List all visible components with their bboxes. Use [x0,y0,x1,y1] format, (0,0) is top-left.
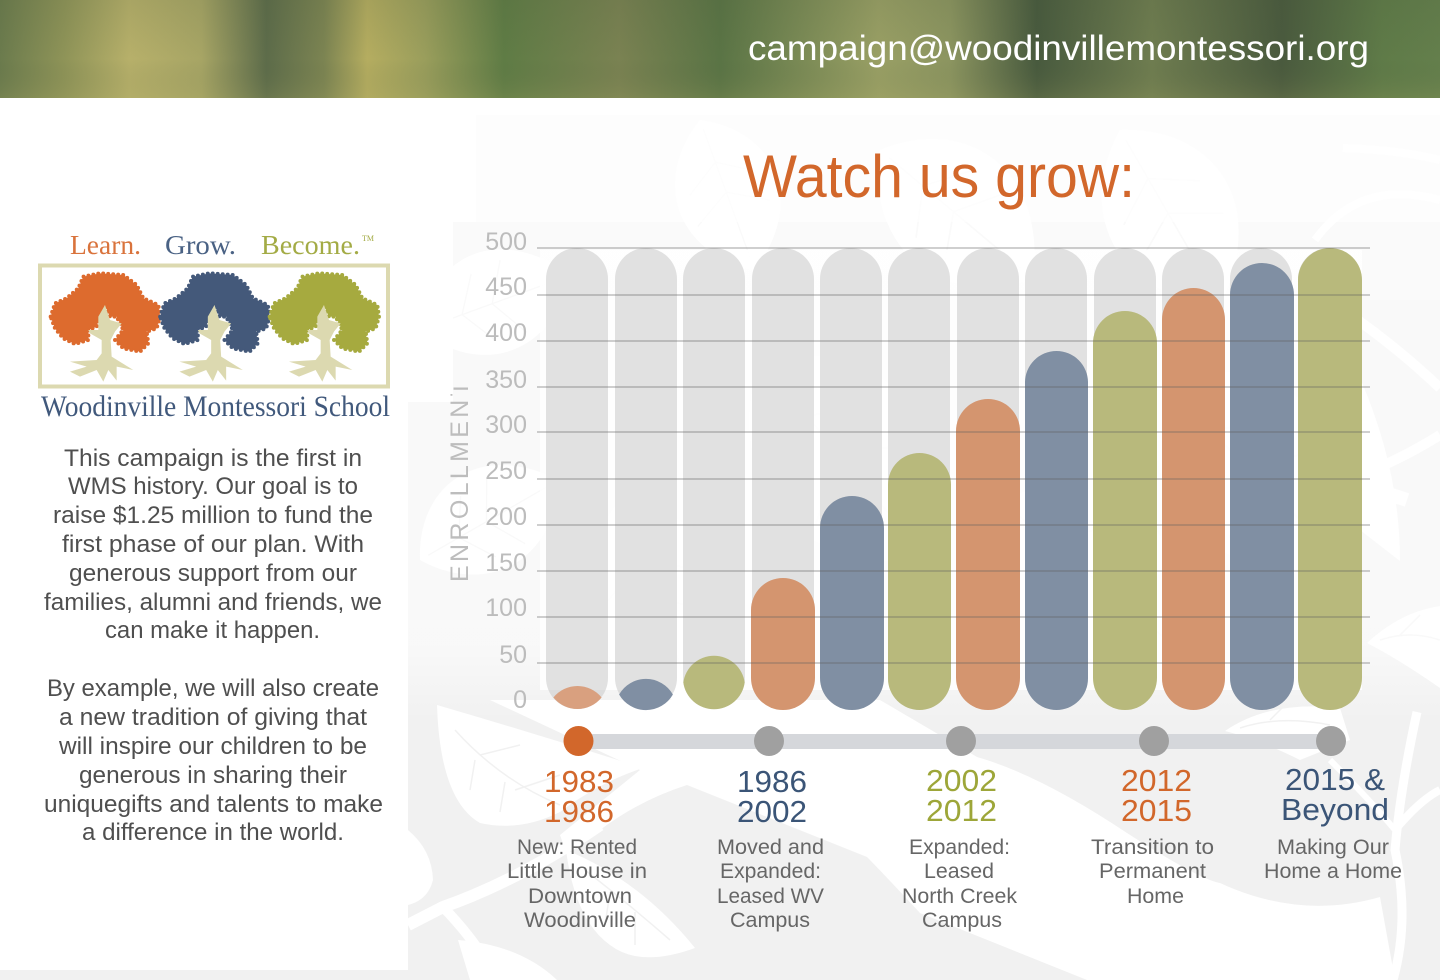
milestone: 1986-2002: Leased WV [717,884,825,908]
milestone: 1983-1986: 1986 [544,794,614,829]
milestone: 1986-2002: Expanded: [720,859,821,883]
y axis numbers: 50 [499,641,527,669]
milestone: 1986-2002: 2002 [737,794,807,829]
y axis numbers: 0 [513,686,527,714]
timeline marker 1983 [564,726,594,756]
campaign paragraph 2: will inspire our children to be [58,733,367,760]
milestone: 2012-2015: Home [1127,884,1184,908]
school name: Woodinville Montessori School [41,390,390,423]
milestone: 1986-2002: Campus [730,908,810,932]
y axis numbers [485,228,527,714]
logo tagline: TM [362,234,374,243]
y axis numbers: 400 [485,319,527,347]
milestone: 2012-2015: 2015 [1121,793,1192,828]
background fade overlay [408,98,1440,720]
milestone: 1983-1986 [507,764,647,932]
y axis numbers: 300 [485,411,527,439]
milestone: 1983-1986: Woodinville [524,908,636,932]
icon: blue tree [160,273,269,382]
campaign paragraph 1: raise $1.25 million to fund the [53,502,373,529]
milestone: 1983-1986: 1983 [544,764,614,799]
milestone: 2015 and beyond: Making Our [1277,835,1389,859]
logo tagline: Become. [261,230,360,260]
campaign paragraph 2: a new tradition of giving that [59,704,367,731]
milestone: 1983-1986: New: Rented [517,835,637,859]
campaign paragraph 2: generous in sharing their [79,762,347,789]
y axis numbers: 450 [485,273,527,301]
campaign paragraph 2 [44,675,383,846]
milestone: 2015 and beyond: Home a Home [1264,859,1402,883]
campaign paragraph 2: uniquegifts and talents to make [44,791,383,818]
milestone: 2015 and beyond: 2015 & [1285,762,1385,797]
logo frame [40,266,388,386]
chart title: Watch us grow: [743,143,1135,210]
logo tagline: Grow. [165,230,236,260]
milestone: 2002-2012 [902,763,1017,932]
y axis numbers: 100 [485,594,527,622]
icon: green tree [270,273,379,382]
y axis numbers: 350 [485,366,527,394]
milestone: 1986-2002: Moved and [717,835,824,859]
campaign paragraph 1: This campaign is the first in [64,445,362,472]
logo tagline: Learn. [70,230,141,260]
y axis numbers: 500 [485,228,527,256]
campaign paragraph 1: can make it happen. [105,617,320,644]
campaign paragraph 1: generous support from our [69,560,357,587]
logo tagline [70,230,374,260]
milestone: 2012-2015: Permanent [1099,859,1206,883]
campaign paragraph 1: families, alumni and friends, we [44,589,382,616]
chart: enrollment bars [446,228,1370,714]
y axis title: ENROLLMENT [446,381,474,582]
milestone: 2015 and beyond: Beyond [1281,792,1389,827]
timeline marker 2015 [1316,726,1346,756]
icon: orange tree [51,273,160,382]
left panel [0,98,408,970]
milestone: 2012-2015: 2012 [1121,763,1192,798]
milestone: 1986-2002 [717,764,825,932]
milestone: 2002-2012: 2002 [926,763,997,798]
email address: campaign@woodinvillemontessori.org [748,29,1369,68]
campaign paragraph 1 [44,445,382,644]
milestone: 2012-2015 [1091,763,1214,908]
timeline marker 2002 [946,726,976,756]
milestone: 2002-2012: North Creek [902,884,1017,908]
school logo [40,230,390,423]
header banner [0,0,1440,98]
milestone: 2015 and beyond [1264,762,1402,883]
timeline marker 2012 [1139,726,1169,756]
y axis numbers: 200 [485,503,527,531]
grey bar tracks [546,248,1360,709]
coloured enrollment bars [553,248,1362,710]
milestone: 2002-2012: Expanded: [909,835,1010,859]
milestone: 2002-2012: 2012 [926,793,997,828]
timeline marker 1986 [754,726,784,756]
milestone: 2002-2012: Campus [922,908,1002,932]
timeline track [578,734,1331,749]
campaign paragraph 2: By example, we will also create [47,675,379,702]
timeline [564,726,1346,756]
campaign paragraph 2: a difference in the world. [82,819,344,846]
milestone: 1983-1986: Little House in [507,859,647,883]
y axis numbers: 150 [485,549,527,577]
campaign paragraph 1: first phase of our plan. With [62,531,364,558]
milestone: 2012-2015: Transition to [1091,835,1214,859]
y axis numbers: 250 [485,457,527,485]
campaign paragraph 1: WMS history. Our goal is to [68,473,358,500]
milestone: 2002-2012: Leased [924,859,994,883]
milestone: 1983-1986: Downtown [528,884,632,908]
milestone: 1986-2002: 1986 [737,764,807,799]
